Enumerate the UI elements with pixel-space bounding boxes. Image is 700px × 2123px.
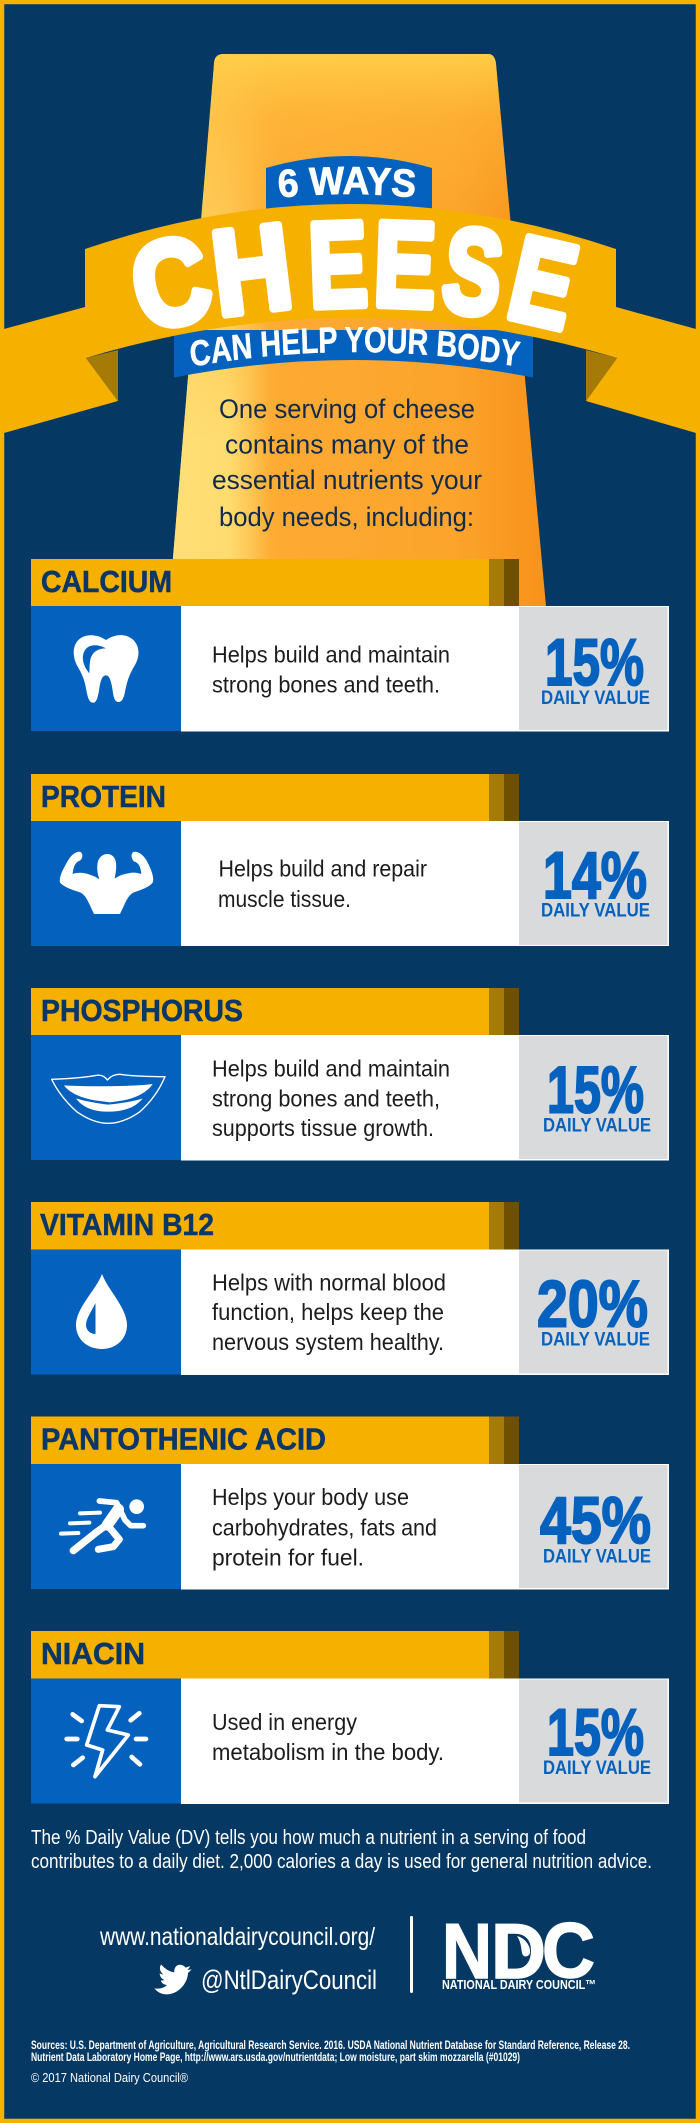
sources	[31, 2040, 630, 2064]
body text: strong bones and teeth,	[212, 1086, 440, 1112]
daily value: 15%: 15%	[547, 1695, 644, 1769]
heading: cheese: S	[436, 202, 510, 342]
intro text: One serving of cheese	[219, 394, 475, 424]
body text	[212, 1270, 446, 1355]
daily value note: The % Daily Value (DV) tells you how much a nutrient in a serving of food	[31, 1827, 586, 1849]
heading: cheese: E	[306, 198, 370, 333]
cheese block	[169, 54, 546, 606]
body text: Used in energy	[212, 1709, 357, 1735]
daily value: 15%	[541, 625, 650, 709]
card body	[31, 1250, 669, 1375]
daily value: 45%: DAILY VALUE	[543, 1547, 651, 1568]
icon: tooth	[74, 635, 138, 703]
title banner	[4, 156, 696, 433]
bar: phosphorus heading	[31, 988, 519, 1036]
icon: energy bolt	[67, 1706, 146, 1777]
heading: cheese: C	[119, 208, 223, 356]
logo letters NDC: C	[542, 1906, 595, 1994]
card body	[31, 821, 669, 946]
heading: can help your body: CAN HELP YOUR BODY	[190, 326, 521, 366]
ribbon fold left	[86, 350, 118, 401]
website link: www.nationaldairycouncil.org/	[99, 1923, 375, 1951]
logo letters NDC: D	[491, 1907, 546, 1995]
body text: Helps with normal blood	[212, 1270, 446, 1296]
body text	[218, 856, 427, 912]
icon: smile	[52, 1074, 165, 1123]
body text: function, helps keep the	[212, 1299, 444, 1325]
intro text: contains many of the	[225, 430, 469, 460]
daily value: 20%: DAILY VALUE	[541, 1330, 650, 1351]
daily value: 15%	[543, 1053, 651, 1137]
ribbon fold right	[586, 350, 617, 401]
heading: cheese	[119, 196, 588, 356]
bar: calcium heading: CALCIUM	[41, 564, 172, 599]
daily value: 14%: DAILY VALUE	[541, 901, 650, 922]
bar: phosphorus heading: PHOSPHORUS	[41, 993, 243, 1028]
intro text: body needs, including:	[219, 502, 474, 532]
card body	[31, 1464, 669, 1590]
yellow ribbon	[4, 204, 696, 433]
logo: national dairy council	[442, 1906, 596, 1995]
divider	[410, 1916, 413, 1993]
daily value: 15%: DAILY VALUE	[541, 688, 650, 709]
twitter handle: @NtlDairyCouncil	[201, 1965, 377, 1995]
body text: Helps build and maintain	[212, 1056, 450, 1082]
panel: vitamin b12	[31, 1202, 669, 1375]
daily value: 15%: DAILY VALUE	[543, 1116, 651, 1137]
bar: pantothenic acid heading	[31, 1416, 519, 1464]
bar: niacin heading	[31, 1631, 519, 1678]
copyright: © 2017 National Dairy Council®	[31, 2070, 188, 2085]
daily value: 15%: 15%	[547, 1053, 644, 1127]
bar: pantothenic acid heading: PANTOTHENIC ACID	[41, 1422, 326, 1456]
body text	[212, 642, 450, 698]
body text: Helps build and repair	[218, 856, 427, 882]
bar: calcium heading	[31, 559, 519, 606]
card body	[31, 606, 669, 732]
card body	[31, 1035, 669, 1160]
heading: cheese: E	[372, 196, 438, 333]
bar: niacin heading: NIACIN	[41, 1636, 145, 1671]
intro text: essential nutrients your	[212, 465, 482, 495]
body text	[212, 1056, 450, 1141]
daily value: 15%	[543, 1695, 651, 1779]
body text: protein for fuel.	[212, 1545, 364, 1571]
daily value: 15%: DAILY VALUE	[543, 1758, 651, 1779]
bar: vitamin b12 heading: VITAMIN B12	[40, 1207, 214, 1242]
heading: 6 ways: 6 WAYS	[278, 166, 415, 198]
logo letters NDC: N	[442, 1907, 492, 1995]
icon: flexing muscles	[60, 852, 153, 914]
logo wordmark: NATIONAL DAIRY COUNCIL™	[442, 1977, 596, 1992]
blue banner: can help your body	[174, 330, 533, 378]
daily value: 20%: 20%	[537, 1267, 648, 1341]
panel: niacin	[31, 1631, 669, 1804]
daily value note	[31, 1827, 652, 1873]
panel: protein	[31, 774, 669, 946]
intro text	[212, 394, 482, 532]
blue banner: 6 ways	[266, 156, 432, 215]
daily value: 14%: 14%	[543, 838, 647, 912]
bar: protein heading	[31, 774, 519, 821]
icon: runner	[61, 1499, 144, 1551]
panel: phosphorus	[31, 988, 669, 1160]
body text	[212, 1484, 437, 1571]
icon: drop	[76, 1274, 127, 1349]
body text: nervous system healthy.	[212, 1329, 444, 1355]
heading: cheese: H	[205, 200, 299, 342]
body text: strong bones and teeth.	[212, 672, 440, 698]
panel: calcium	[31, 559, 669, 732]
panel: pantothenic acid	[31, 1416, 669, 1590]
daily value: 15%: 15%	[545, 625, 644, 699]
icon: twitter bird	[154, 1964, 192, 1994]
body text: supports tissue growth.	[212, 1115, 434, 1141]
card body	[31, 1678, 669, 1804]
body text: metabolism in the body.	[212, 1739, 444, 1765]
bar: protein heading: PROTEIN	[41, 779, 166, 814]
daily value: 45%: 45%	[540, 1483, 651, 1557]
body text: carbohydrates, fats and	[212, 1515, 437, 1541]
body text: muscle tissue.	[218, 886, 351, 912]
bar: vitamin b12 heading	[31, 1202, 519, 1250]
logo letters NDC	[442, 1906, 595, 1995]
body text: Helps build and maintain	[212, 642, 450, 668]
sources: Nutrient Data Laboratory Home Page, http://www.ars.usda.gov/nutrientdata; Low moisture, part skim mozzarella (#01029)	[31, 2052, 520, 2064]
heading: cheese: E	[498, 210, 588, 355]
body text	[212, 1709, 444, 1765]
body text: Helps your body use	[212, 1484, 409, 1510]
logo drop	[517, 1936, 530, 1956]
